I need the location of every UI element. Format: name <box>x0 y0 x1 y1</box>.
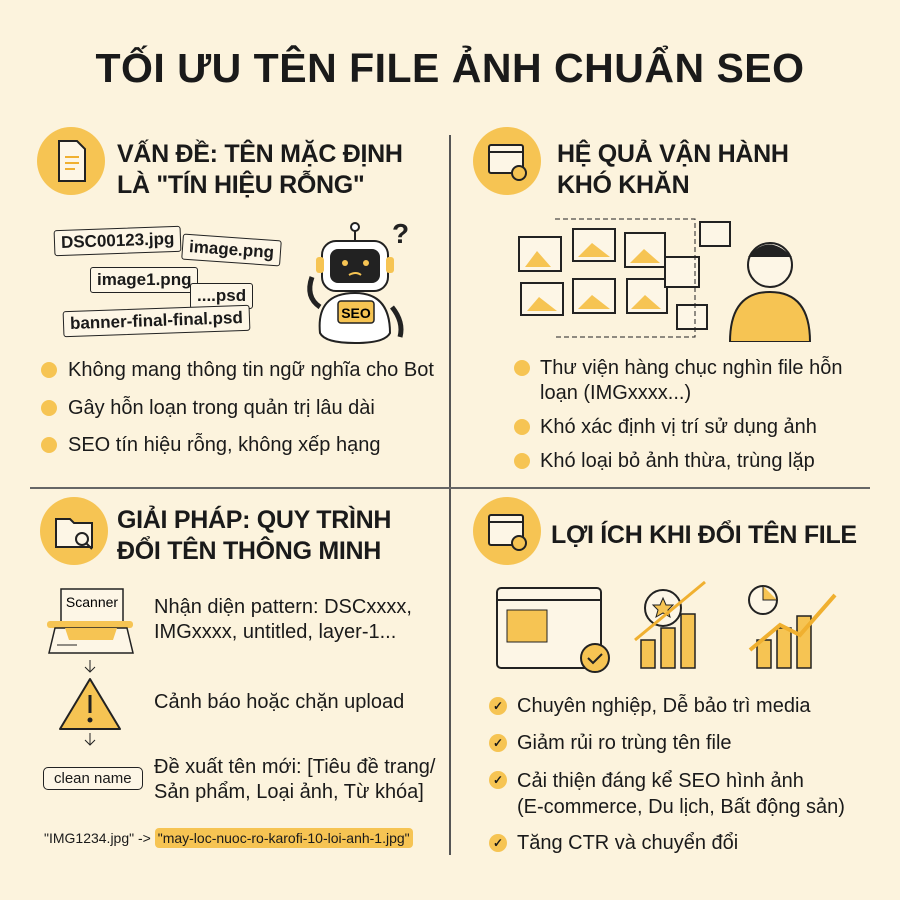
clean name button: clean name <box>54 770 132 787</box>
panel: benefits <box>473 497 857 854</box>
step text 3: Sản phẩm, Loại ảnh, Từ khóa] <box>154 781 424 803</box>
heading: VẤN ĐỀ: TÊN MẶC ĐỊNH <box>117 140 403 168</box>
icon: robot: ? <box>392 218 409 249</box>
panel: problem <box>37 127 434 456</box>
heading <box>117 140 403 199</box>
panel: benefits: Giảm rủi ro trùng tên file <box>517 732 732 754</box>
heading: ĐỔI TÊN THÔNG MINH <box>117 537 381 565</box>
icon: code check <box>473 497 541 565</box>
example rename: "IMG1234.jpg" -> "may-loc-nuoc-ro-karofi-10-loi-anh-1.jpg" <box>44 830 410 846</box>
panel: consequences: Khó xác định vị trí sử dụng ảnh <box>540 416 817 438</box>
bullets <box>41 362 57 378</box>
heading: HỆ QUẢ VẬN HÀNH <box>557 140 789 168</box>
panel: benefits: ✓ <box>493 736 503 750</box>
filenames <box>54 226 282 338</box>
illustration: images and person <box>518 218 811 342</box>
panel: consequences <box>473 127 842 472</box>
panel: benefits: Chuyên nghiệp, Dễ bảo trì media <box>517 695 811 717</box>
icon: scanner: Scanner <box>66 594 118 610</box>
panel: benefits: ✓ <box>493 773 503 787</box>
heading <box>117 506 391 565</box>
icon: scanner <box>47 588 134 746</box>
panel: problem: Không mang thông tin ngữ nghĩa cho Bot <box>68 359 434 381</box>
filenames: banner-final-final.psd <box>70 308 243 333</box>
step text 1: Nhận diện pattern: DSCxxxx, <box>154 596 412 618</box>
filenames: image.png <box>188 237 275 262</box>
icons: charts <box>496 580 836 673</box>
step text 3: Đề xuất tên mới: [Tiêu đề trang/ <box>154 756 435 778</box>
icon: browser error <box>473 127 541 195</box>
dividers <box>449 135 450 855</box>
panel: benefits: ✓ <box>493 836 503 850</box>
bullets <box>489 697 507 715</box>
icon: document <box>37 127 105 195</box>
panel: problem: Gây hỗn loạn trong quản trị lâu dài <box>68 397 375 419</box>
step text 2: Cảnh báo hoặc chặn upload <box>154 691 404 713</box>
icon: robot: SEO <box>341 305 371 321</box>
panel: consequences: Thư viện hàng chục nghìn file hỗn <box>540 357 842 379</box>
heading: LỢI ÍCH KHI ĐỔI TÊN FILE <box>551 521 857 549</box>
step text 3 <box>154 756 436 803</box>
filenames: ....psd <box>197 286 246 305</box>
bullets: ✓ <box>493 699 503 713</box>
heading: GIẢI PHÁP: QUY TRÌNH <box>117 506 391 534</box>
filenames: DSC00123.jpg <box>61 229 175 252</box>
filenames: image1.png <box>97 270 191 289</box>
heading: KHÓ KHĂN <box>557 171 689 199</box>
clean name button <box>43 767 143 790</box>
panel: problem: SEO tín hiệu rỗng, không xếp hạng <box>68 434 380 456</box>
title: TỐI ƯU TÊN FILE ẢNH CHUẨN SEO <box>95 45 805 91</box>
bullets <box>514 360 530 376</box>
panel: benefits: Tăng CTR và chuyển đổi <box>517 832 738 854</box>
step text 1: IMGxxxx, untitled, layer-1... <box>154 621 396 643</box>
icon: folder search <box>40 497 108 565</box>
panel: consequences: loạn (IMGxxxx...) <box>540 382 691 404</box>
panel: solution <box>40 497 436 848</box>
panel: consequences: Khó loại bỏ ảnh thừa, trùng lặp <box>540 450 815 472</box>
panel: benefits: Cải thiện đáng kể SEO hình ảnh <box>517 770 804 792</box>
step text 1 <box>154 596 412 643</box>
heading <box>557 140 789 199</box>
panel: benefits: (E-commerce, Du lịch, Bất động sản) <box>517 796 845 818</box>
heading: LÀ "TÍN HIỆU RỖNG" <box>117 171 364 199</box>
icon: robot <box>307 218 409 344</box>
